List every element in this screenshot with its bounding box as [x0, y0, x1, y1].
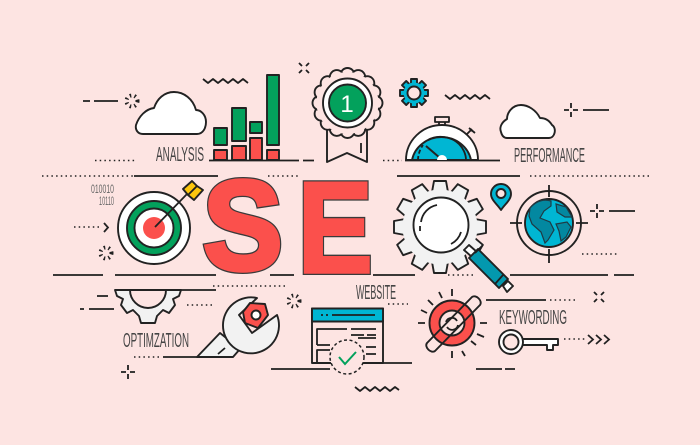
icon: cross mark right: [594, 292, 604, 302]
text: WEBSITE: [356, 282, 396, 304]
icon: cloud left: [136, 92, 206, 134]
icon: ranking badge: [312, 68, 382, 162]
text: ANALYSIS: [156, 144, 204, 166]
icon: cross mark: [299, 63, 309, 73]
icon: stopwatch: [406, 117, 478, 160]
icon: globe in crosshair: [510, 185, 588, 263]
text: PERFORMANCE: [514, 145, 585, 167]
icon: magnifier with gear: [394, 181, 513, 292]
icon: wrench with nut: [197, 297, 279, 357]
icon: plus spark right: [590, 204, 604, 218]
text: OPTIMZATION: [123, 330, 189, 352]
icon: small blue gear: [400, 79, 428, 107]
text: 10110: [99, 194, 114, 208]
icon: life buoy with rays: [418, 289, 487, 358]
icon: wave bottom: [355, 387, 399, 391]
icon: wave right: [445, 95, 490, 99]
icon: wave top: [203, 79, 248, 83]
binary digits: [91, 182, 114, 208]
text: KEYWORDING: [499, 307, 567, 329]
icon: key: [499, 330, 558, 354]
icon: chevron arrow: [104, 223, 108, 232]
icon: triple chevron arrow: [588, 335, 609, 344]
icon: ranking badge: 1: [340, 91, 354, 118]
icon: spark middle: [288, 296, 300, 306]
icon: spark left: [100, 248, 112, 258]
binary digits: 010010: [91, 182, 114, 196]
letter S: S: [203, 155, 283, 298]
icon: spark top left: [126, 96, 138, 106]
icon: plus spark: [564, 103, 578, 117]
icon: target with dart: [118, 181, 203, 264]
letter S: S: [203, 155, 283, 298]
icon: half gear: [115, 290, 181, 323]
icon: plus spark bottom: [121, 365, 135, 379]
letter E: E: [298, 156, 373, 300]
icon: website window: [312, 308, 383, 374]
icon: cloud right: [500, 105, 555, 138]
letter E: E: [298, 156, 373, 300]
icon: map pin: [491, 184, 511, 210]
bar chart: analysis: [214, 75, 279, 160]
